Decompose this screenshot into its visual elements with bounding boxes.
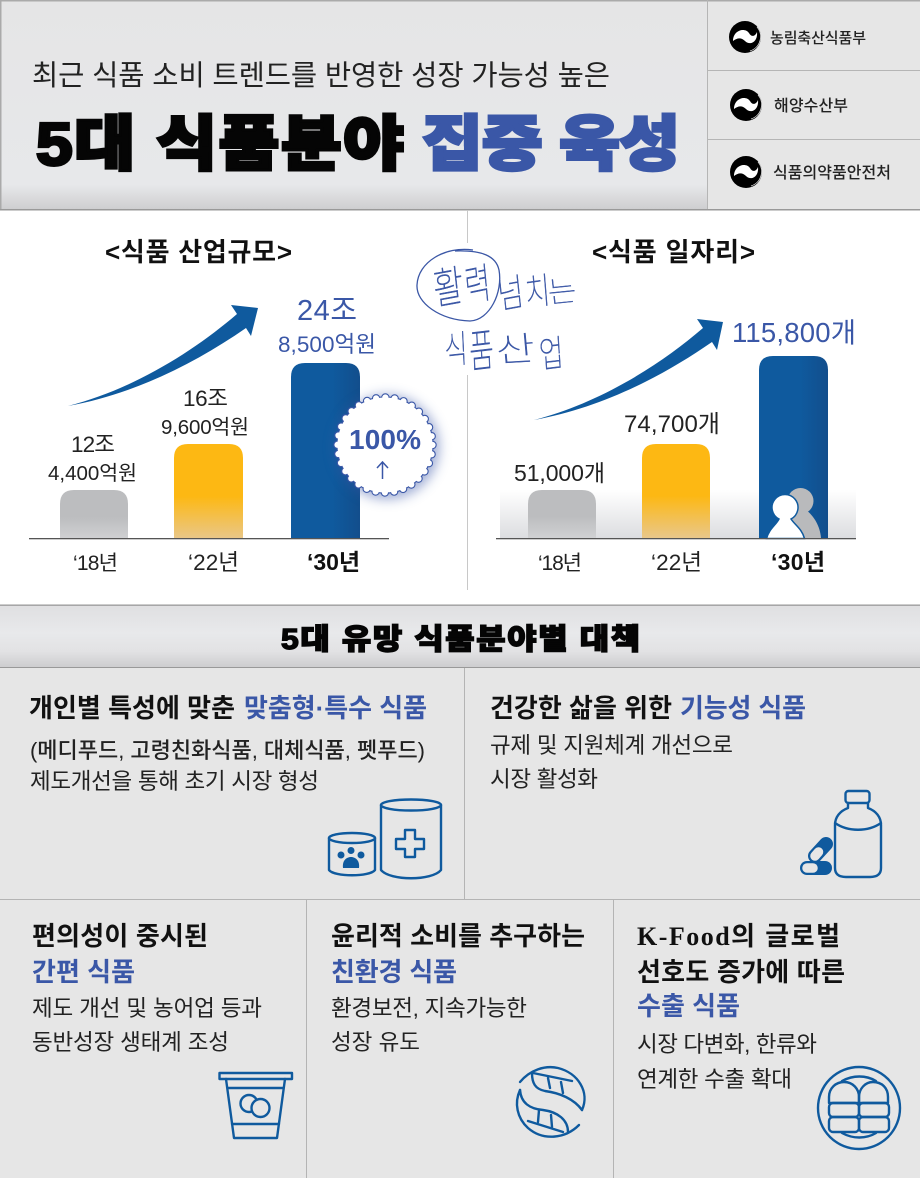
handwritten note [417,249,578,378]
year labels: ‘30년 [771,549,825,575]
card heading: 수출 식품 [637,991,740,1021]
chart heading: <식품 일자리> [592,237,755,267]
bar 2022 [174,444,243,539]
icon: people [766,488,821,538]
header subtitle: 최근 식품 소비 트렌드를 반영한 성장 가능성 높은 [32,60,610,92]
icon: pill bottle [807,791,881,877]
card heading [29,693,427,723]
card heading [490,693,806,723]
handwritten note: 식 [443,328,469,372]
year labels: ‘30년 [307,549,360,575]
ministry logo: 식품의약품안전처 [730,156,891,188]
growth arrow [68,305,258,406]
year labels [538,549,825,575]
baseline fade [500,490,856,538]
header panel [0,0,920,210]
ministry logo: 농림축산식품부 [729,21,866,53]
icon: cup [220,1073,292,1138]
header title: 5대 식품분야 [36,112,404,178]
card body: 환경보전, 지속가능한 [331,996,527,1021]
card heading: 개인별 특성에 맞춘 [29,693,235,723]
value 2018: 4,400억원 [48,462,137,485]
ministry logo: 해양수산부: 해양수산부 [774,97,848,115]
card body: 시장 활성화 [490,767,598,792]
handwritten note: 넘 [496,272,526,318]
card body: (메디푸드, 고령친화식품, 대체식품, 펫푸드) [30,738,425,763]
icon: food cans [329,800,441,878]
value 2022: 9,600억원 [161,416,249,439]
year labels: ‘18년 [538,552,582,575]
card body: 제도개선을 통해 초기 시장 형성 [30,769,319,794]
bar 2018 [60,490,128,539]
card heading: 건강한 삶을 위한 [490,693,672,723]
value 2018: 12조 [71,432,115,457]
header title [36,112,680,178]
year labels [73,549,360,575]
card body: 동반성장 생태계 조성 [32,1030,229,1055]
card body [30,738,425,794]
value 2022: 16조 [183,386,228,411]
value 2018 [48,432,137,485]
card heading: 맞춤형·특수 식품 [244,693,427,723]
panel: customized and special food [0,668,464,899]
section heading bar [0,604,920,668]
ministry logo: 식품의약품안전처: 식품의약품안전처 [773,164,891,182]
card heading: 간편 식품 [32,957,135,987]
axis line [29,538,389,539]
panel: convenience food [0,900,306,1178]
card body: 시장 다변화, 한류와 [637,1032,817,1057]
bar 2030 [759,356,828,538]
card heading: 친환경 식품 [331,957,457,987]
center divider [466,210,468,590]
badge: 100% increase [335,395,439,499]
card body [490,733,733,792]
handwritten note: 는 [546,275,578,310]
card heading: 기능성 식품 [680,693,806,723]
card body: 성장 유도 [331,1030,420,1055]
value 2030: 24조 [297,295,357,327]
panel: eco-friendly food [307,900,613,1178]
card body [331,996,527,1055]
chart heading: <식품 산업규모> [105,237,292,267]
card heading: 선호도 증가에 따른 [637,957,845,987]
panel: export food [614,900,920,1178]
ministry logo: 농림축산식품부: 농림축산식품부 [770,30,866,47]
axis line [496,538,856,539]
handwritten note: 업 [538,332,565,376]
value 2022 [161,386,249,439]
section heading bar: 5대 유망 식품분야별 대책 [281,623,640,656]
card body [32,996,262,1055]
panel: functional food [465,668,920,899]
bar 2022 [642,444,710,538]
card heading [331,921,585,987]
value 2030 [278,295,376,357]
chart: food industry size [29,237,439,575]
card body: 제도 개선 및 농어업 등과 [32,996,262,1021]
bar 2030 [291,363,360,539]
value 2018: 51,000개 [514,460,605,486]
handwritten note: 품 [468,325,495,378]
card heading [32,921,208,987]
card body: 연계한 수출 확대 [637,1067,792,1092]
chart: food jobs [496,237,856,575]
ministry logo: 해양수산부 [730,89,848,121]
card heading [637,921,845,1021]
card heading: 편의성이 중시된 [32,921,208,951]
year labels: ‘18년 [73,552,118,575]
header title: 집중 육성 [422,112,680,178]
card body: 규제 및 지원체계 개선으로 [490,733,733,758]
value 2030: 8,500억원 [278,332,376,357]
card heading: K-Food의 글로벌 [637,921,840,951]
card heading: 윤리적 소비를 추구하는 [331,921,585,951]
bar 2018 [528,490,596,538]
year labels: ‘22년 [188,550,239,575]
value 2022: 74,700개 [624,411,720,438]
icon: leaves [517,1067,585,1137]
card body [637,1032,817,1092]
handwritten note: 력 [462,260,493,311]
badge: 100% increase: 100% [349,424,421,455]
value 2030: 115,800개 [732,317,856,348]
handwritten note: 산 [494,331,536,370]
handwritten note: 치 [523,270,552,314]
year labels: ‘22년 [651,550,702,575]
icon: rice bowl [818,1067,900,1149]
growth arrow [534,319,723,420]
handwritten note: 활 [431,262,466,315]
card grid lines [0,668,920,1178]
